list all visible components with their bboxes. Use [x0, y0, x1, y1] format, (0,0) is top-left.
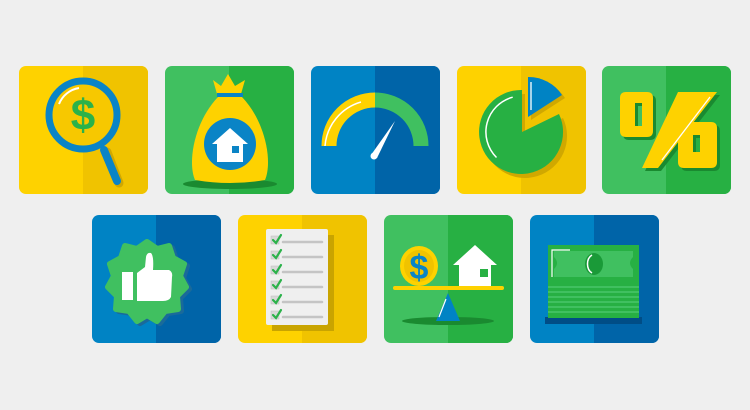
icon: badge with thumb	[108, 242, 189, 323]
icon: balance scale: $	[410, 249, 429, 287]
tile: gauge	[311, 66, 440, 194]
icon: percent sign	[620, 92, 720, 171]
tile: thumbs up badge	[92, 215, 221, 344]
tile: money stack	[530, 215, 659, 344]
tile: checklist	[238, 215, 367, 344]
tile: magnifier dollar	[19, 66, 148, 194]
tile: pie chart	[457, 66, 586, 194]
icon: pie	[479, 77, 567, 178]
tile: percent	[602, 66, 731, 194]
tile: balance dollar vs house	[384, 215, 513, 344]
icon: magnifying glass with dollar: $	[71, 91, 95, 140]
icon: checklist paper	[266, 229, 334, 331]
icon: speedometer	[325, 100, 421, 160]
tile: money bag house	[165, 66, 294, 194]
icon: stack of bills	[545, 245, 642, 324]
icon: money bag	[183, 74, 277, 189]
